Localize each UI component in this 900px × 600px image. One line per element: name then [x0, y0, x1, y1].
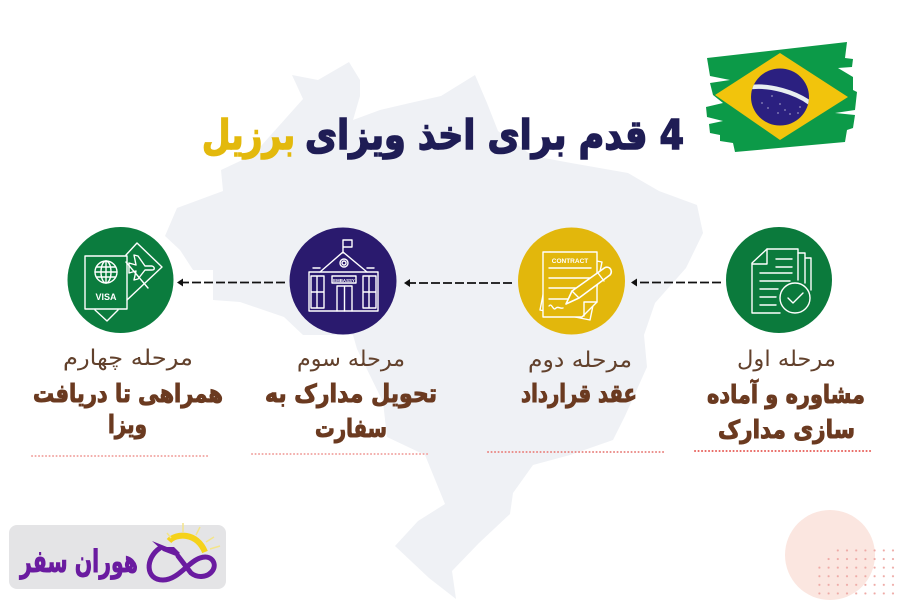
step 2 heading: عقد قرارداد — [521, 379, 637, 409]
arrow: step 2 to step 3 — [404, 279, 512, 287]
icon: embassy building: EMBASSY — [333, 278, 355, 283]
step 2 label: مرحله دوم — [528, 348, 632, 373]
logo wordmark: هوران سفر — [19, 544, 138, 580]
title: 4 قدم برای اخذ ویزای — [305, 111, 684, 160]
panel: step 2 — [488, 228, 665, 452]
step 4 heading line 1: همراهی تا دریافت — [33, 379, 223, 409]
panel: step 1 — [695, 227, 872, 451]
step 1 label: مرحله اول — [737, 347, 836, 372]
panel: step 3 — [252, 228, 437, 454]
step 3 heading line 1: تحویل مدارک به — [265, 379, 437, 409]
icon: sun — [167, 523, 220, 552]
icon: infinity route with plane — [149, 541, 214, 580]
icon: contract and pen — [518, 228, 625, 334]
arrow: step 1 to step 2 — [631, 278, 721, 286]
decorative pink circle with dots — [785, 510, 900, 600]
arrow: step 3 to step 4 — [177, 278, 285, 286]
map of Brazil background — [165, 62, 703, 599]
title: برزیل — [202, 111, 295, 159]
step 1 heading line 2: سازی مدارک — [718, 415, 855, 444]
step 3 label: مرحله سوم — [297, 347, 405, 372]
icon: Brazilian flag — [706, 42, 857, 152]
icon: visa passport: VISA — [95, 292, 117, 302]
icon: documents with check mark — [726, 227, 832, 333]
step 4 heading line 2: ویزا — [108, 410, 147, 440]
icon: embassy building — [290, 228, 396, 334]
icon: visa passport — [68, 227, 174, 333]
step 4 label: مرحله چهارم — [63, 346, 193, 371]
logo — [9, 523, 226, 589]
panel: step 4 — [32, 227, 223, 456]
step 3 heading line 2: سفارت — [315, 414, 387, 443]
icon: contract and pen: CONTRACT — [552, 258, 588, 265]
step 1 heading line 1: مشاوره و آماده — [707, 379, 865, 410]
